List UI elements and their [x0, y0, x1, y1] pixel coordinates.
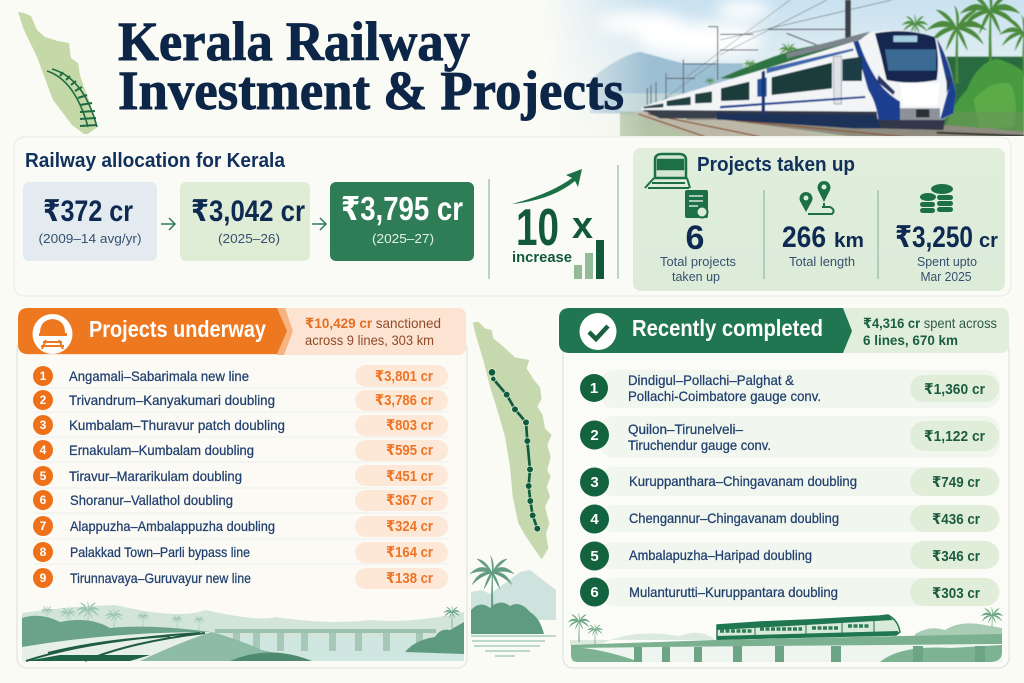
heading: railway allocation: Railway allocation for Kerala [25, 150, 286, 172]
stat: spent up to Mar 2025 [895, 184, 998, 284]
row 3: ₹803 cr [386, 417, 433, 434]
row 6 [33, 490, 448, 511]
header: projects underway: ₹10,429 cr sanctioned [305, 315, 441, 331]
panel: recently completed [559, 308, 1009, 668]
row 5: 5 [40, 469, 47, 483]
row 7: 7 [40, 519, 47, 533]
row 5: ₹451 cr [386, 468, 433, 485]
header: recently completed: 6 lines, 670 km [863, 332, 958, 348]
row 4 [580, 504, 1000, 534]
stat: total length: Total length [789, 254, 855, 269]
row 3: Kumbalam–Thuravur patch doubling [69, 417, 285, 433]
route line with stations [488, 369, 541, 532]
row 5: 5 [590, 548, 599, 565]
row 4: 4 [40, 443, 47, 457]
row 2: 2 [590, 427, 599, 444]
title: Investment & Projects [118, 60, 624, 121]
row 5 [33, 465, 448, 486]
header: recently completed [559, 308, 1009, 353]
row 7: ₹324 cr [386, 518, 433, 535]
stat: 2009-14 allocation [23, 182, 157, 261]
row 6: 6 [40, 493, 47, 507]
stat: 2009-14 allocation: (2009–14 avg/yr) [38, 231, 142, 246]
stat: 2025-27 allocation: (2025–27) [372, 231, 434, 246]
callout: 10x increase: 10 [516, 199, 559, 257]
stat: 2025-27 allocation [330, 182, 474, 261]
row 6: 6 [590, 584, 599, 601]
icon: Kerala map with railway track [18, 12, 97, 134]
row 7: Alappuzha–Ambalappuzha doubling [70, 518, 275, 534]
row 3: 3 [40, 418, 47, 432]
row 3: ₹749 cr [932, 474, 980, 491]
heading: projects taken up: Projects taken up [697, 154, 855, 176]
title [118, 11, 624, 121]
stat: total projects: taken up [672, 269, 720, 284]
row 1: 1 [40, 369, 47, 383]
illustration: train on bridge [568, 607, 1003, 662]
header: projects underway [18, 308, 466, 355]
stat: 2025-26 allocation [180, 182, 310, 261]
illustration: palm, mountain and water [469, 555, 556, 656]
stat: spent up to Mar 2025: Spent upto [917, 254, 977, 269]
row 4: Ernakulam–Kumbalam doubling [69, 442, 254, 458]
row 9 [33, 568, 448, 589]
icon: hard hat on track [32, 314, 72, 354]
row 5 [580, 541, 1000, 570]
row 3 [33, 415, 448, 436]
row 2 [580, 416, 1000, 458]
stat: total projects: Total projects [660, 254, 736, 269]
stat: spent up to Mar 2025: Mar 2025 [920, 269, 972, 284]
row 2: Quilon–Tirunelveli– [628, 421, 743, 437]
stat: total projects [660, 190, 736, 284]
row 4: ₹436 cr [932, 511, 980, 528]
icon: check mark [580, 313, 616, 350]
illustration: Kerala route map [473, 322, 552, 559]
row 2: 2 [40, 393, 47, 407]
row 2: Tiruchendur gauge conv. [628, 437, 771, 453]
row 1 [33, 365, 448, 387]
row 6: Shoranur–Vallathol doubling [70, 492, 233, 508]
row 4 [33, 440, 448, 461]
row 1: Angamali–Sabarimala new line [69, 368, 249, 384]
row 2: ₹3,786 cr [375, 392, 433, 409]
row 8: 8 [40, 545, 47, 559]
callout: 10x increase: x [572, 205, 593, 247]
panel: allocation summary [14, 137, 1011, 296]
arrow [161, 218, 175, 230]
header: recently completed: ₹4,316 cr spent across [863, 315, 997, 331]
arrow [312, 218, 326, 230]
stat: 2025-26 allocation: (2025–26) [218, 231, 280, 246]
row 8: ₹164 cr [386, 544, 433, 561]
row 9: 9 [40, 571, 47, 585]
stat: 2025-27 allocation: ₹3,795 cr [341, 190, 463, 227]
row 9: ₹138 cr [386, 570, 433, 587]
row 5: ₹346 cr [932, 548, 980, 565]
callout: 10x increase: increase [512, 249, 572, 266]
row 3 [580, 467, 1000, 496]
row 6 [580, 578, 1000, 606]
row 6: Mulanturutti–Kuruppantara doubling [629, 584, 838, 600]
row 4: 4 [590, 511, 599, 528]
row 8 [33, 542, 448, 563]
hero photo: train on Kerala railway [540, 0, 1024, 137]
row 5: Tiravur–Mararikulam doubling [69, 468, 242, 484]
row 6: ₹303 cr [932, 585, 980, 602]
row 2 [33, 390, 448, 411]
row 1 [580, 370, 1000, 408]
row 2: ₹1,122 cr [924, 428, 985, 445]
header: projects underway: Projects underway [89, 316, 266, 342]
row 6: ₹367 cr [386, 492, 433, 509]
row 4: Chengannur–Chingavanam doubling [629, 510, 839, 526]
row 1: ₹1,360 cr [924, 381, 985, 398]
stat: 2025-26 allocation: ₹3,042 cr [191, 195, 305, 228]
header: recently completed: Recently completed [632, 315, 823, 341]
row 1: ₹3,801 cr [375, 368, 433, 385]
stat: total length: 266 [782, 221, 826, 254]
stat: 2009-14 allocation: ₹372 cr [43, 195, 133, 228]
header: projects underway: across 9 lines, 303 km [305, 332, 434, 348]
title: Kerala Railway [118, 11, 470, 72]
stat: spent up to Mar 2025: cr [979, 230, 998, 252]
row 2: Trivandrum–Kanyakumari doubling [69, 392, 275, 408]
row 4: ₹595 cr [386, 442, 433, 459]
row 3: 3 [590, 474, 599, 491]
panel: projects taken up [633, 148, 1005, 291]
callout: 10x increase [512, 169, 604, 279]
row 5: Ambalapuzha–Haripad doubling [629, 547, 812, 563]
row 1: Pollachi-Coimbatore gauge conv. [628, 388, 821, 404]
illustration: rail and river bridge landscape [22, 601, 464, 661]
icon: train front [645, 154, 690, 188]
panel: projects underway [17, 308, 467, 668]
row 8: Palakkad Town–Parli bypass line [70, 544, 250, 560]
stat: spent up to Mar 2025: ₹3,250 [895, 221, 973, 254]
stat: total length: km [834, 230, 864, 252]
row 1: Dindigul–Pollachi–Palghat & [628, 372, 795, 388]
stat: total projects: 6 [686, 219, 704, 257]
row 1: 1 [590, 380, 598, 397]
row 3: Kuruppanthara–Chingavanam doubling [629, 473, 857, 489]
row 7 [33, 516, 448, 537]
stat: total length [782, 181, 864, 269]
row 9: Tirunnavaya–Guruvayur new line [70, 570, 251, 586]
